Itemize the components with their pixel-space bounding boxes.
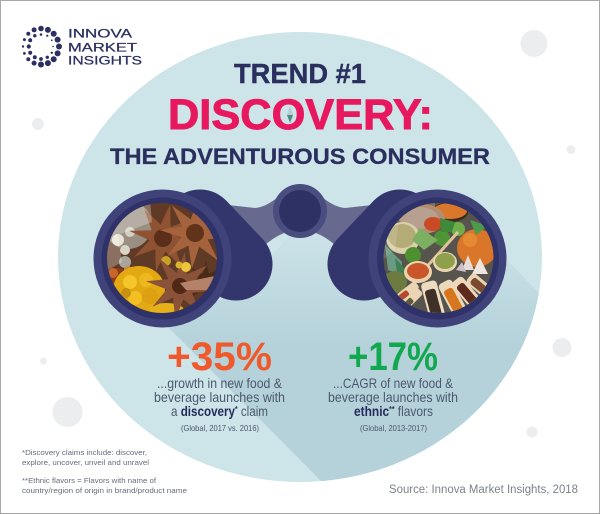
subheading: THE ADVENTUROUS CONSUMER bbox=[110, 144, 490, 169]
description: beverage launches with bbox=[328, 389, 458, 405]
logo text: INNOVA bbox=[68, 27, 132, 41]
decorative grey dots bbox=[32, 30, 576, 438]
stat: +35% bbox=[154, 335, 285, 433]
description bbox=[154, 375, 285, 419]
source line: Source: Innova Market Insights, 2018 bbox=[389, 484, 578, 496]
figure +17%: +17% bbox=[348, 335, 438, 379]
description: ** bbox=[389, 405, 395, 414]
left photo: star anise and spices bbox=[107, 203, 217, 313]
binocular shadow bbox=[168, 266, 539, 481]
logo text: INSIGHTS bbox=[68, 53, 142, 67]
right barrel body bbox=[364, 226, 400, 264]
description: flavors bbox=[394, 403, 433, 419]
left barrel body bbox=[200, 226, 236, 264]
scope note: (Global, 2013-2017) bbox=[360, 423, 427, 433]
left lens ring bbox=[94, 190, 232, 328]
footnotes bbox=[22, 448, 187, 495]
title bbox=[110, 58, 490, 169]
description: a discovery bbox=[171, 403, 246, 419]
description: ...growth in new food & bbox=[157, 375, 283, 391]
logo text bbox=[68, 27, 142, 67]
figure +35%: +35% bbox=[167, 335, 272, 379]
description: * bbox=[235, 405, 238, 414]
footnotes: country/region of origin in brand/product name bbox=[22, 486, 187, 495]
description: claim bbox=[238, 403, 268, 419]
binoculars bbox=[94, 184, 506, 328]
description: ...CAGR of new food & bbox=[333, 375, 454, 391]
right photo: assorted spices bbox=[384, 203, 494, 313]
heading: discovery: DISCOVERY: bbox=[168, 92, 433, 139]
footnotes: **Ethnic flavors = Flavors with name of bbox=[22, 476, 157, 485]
logo bbox=[22, 26, 142, 68]
footnotes: *Discovery claims include: discover, bbox=[22, 448, 147, 457]
heading: trend number: TREND #1 bbox=[234, 58, 366, 89]
right lens ring bbox=[368, 190, 506, 328]
logo text: MARKET bbox=[68, 40, 138, 54]
logo mark bbox=[22, 26, 62, 68]
icon: compass needle bbox=[287, 107, 293, 123]
description: beverage launches with bbox=[154, 389, 285, 405]
stat: +17% bbox=[328, 335, 458, 433]
background circle bbox=[58, 32, 542, 482]
scope note: (Global, 2017 vs. 2016) bbox=[181, 423, 259, 433]
description bbox=[328, 375, 458, 419]
binocular bridge bbox=[228, 184, 372, 247]
footnotes: explore, uncover, unveil and unravel bbox=[22, 458, 149, 467]
description: ethnic bbox=[354, 403, 389, 419]
